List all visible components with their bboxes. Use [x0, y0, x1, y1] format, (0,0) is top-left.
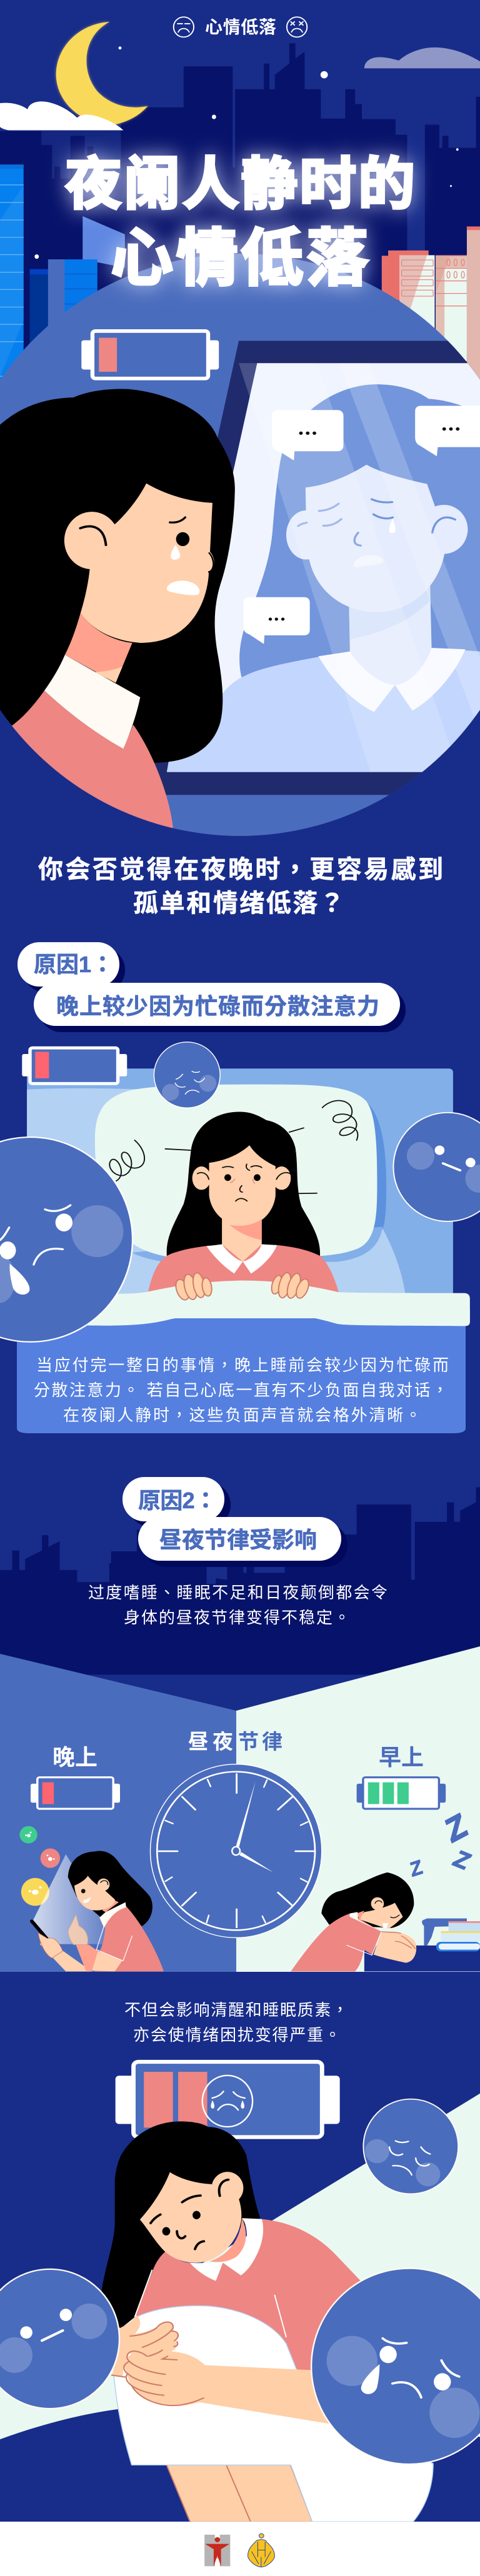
- reason 1 label: 晚上较少因为忙碌而分散注意力: [56, 993, 379, 1019]
- text: reason 2: 身体的昼夜节律变得不稳定。: [124, 1608, 350, 1627]
- salmon buildings right: [382, 226, 480, 382]
- battery: morning: [357, 1778, 446, 1809]
- arm: [124, 2352, 334, 2425]
- dark skyline: [0, 43, 480, 437]
- body copy: 当应付完一整日的事情，晚上睡前会较少因为忙碌而: [36, 1356, 449, 1375]
- title: [65, 153, 415, 294]
- woman in bed: [148, 1111, 339, 1310]
- lighter distant building: [41, 131, 121, 179]
- light rays: [239, 363, 480, 772]
- moon: [56, 22, 148, 126]
- reflection neck: [349, 585, 432, 685]
- face: [64, 484, 214, 643]
- stars: [34, 46, 459, 259]
- blanket hem: [43, 1310, 470, 1326]
- panel: day and night background: [0, 1646, 480, 1972]
- emoji bubbles: [19, 1826, 60, 1906]
- battery: night: [31, 1778, 120, 1809]
- big battery: [116, 2062, 340, 2137]
- neck: [65, 613, 132, 683]
- small heading: 心情低落: [205, 17, 276, 37]
- title: 夜阑人静时的: [65, 153, 415, 216]
- cloud: violet: [364, 47, 480, 68]
- mirror screen: [167, 363, 480, 772]
- body copy: 在夜阑人静时，这些负面声音就会格外清晰。: [63, 1406, 421, 1425]
- woman face: [140, 2172, 263, 2281]
- label: night: 晚上: [52, 1744, 98, 1770]
- icon: crying face: [202, 2076, 252, 2127]
- label: morning: 早上: [379, 1744, 424, 1770]
- panel: circadian rhythm: [19, 1764, 480, 1971]
- blanket: [86, 1281, 470, 1325]
- shirt: [135, 2219, 361, 2370]
- shirt: [11, 690, 173, 828]
- cloud: white: [0, 101, 123, 130]
- reflection hair: [239, 384, 480, 679]
- body copy: 分散注意力。 若自己心底一直有不少负面自我对话，: [34, 1381, 448, 1400]
- question heading: 你会否觉得在夜晚时，更容易感到: [38, 856, 443, 883]
- monitor frame: [139, 341, 480, 795]
- reason 2 label: 昼夜节律受影响: [159, 1527, 317, 1553]
- mint backdrop: [0, 2094, 480, 2439]
- icon: sad face: [174, 17, 194, 37]
- battery: very low: [22, 1048, 127, 1083]
- body copy: [34, 1356, 449, 1425]
- logo: yellow hands: [248, 2534, 274, 2567]
- text panel: reason 1: [17, 1310, 470, 1433]
- phone light: [33, 1854, 118, 1944]
- leg: [165, 2462, 312, 2522]
- reflection: [167, 363, 480, 772]
- headboard: [27, 1068, 453, 1296]
- blue buildings middle: [30, 216, 125, 350]
- text: worsening: [124, 2001, 348, 2044]
- emotion bubble: big left crying: [0, 1137, 132, 1342]
- logo: department: [204, 2535, 230, 2566]
- woman: [0, 389, 235, 856]
- finger lines: [112, 2322, 204, 2405]
- sleeping girl: [291, 1872, 416, 1971]
- mattress: [27, 1088, 406, 1296]
- reason 1 label: 原因1：: [34, 952, 114, 977]
- skyline and reason 2 backdrop: [0, 1487, 480, 1674]
- emotion bubble: small top: [154, 1042, 220, 1108]
- emotion bubble: big right crying: [311, 2269, 480, 2464]
- city night scene: [0, 22, 480, 437]
- table and books: [364, 1919, 480, 1971]
- hands on blanket: [173, 1271, 311, 1301]
- icon: dizzy face: [287, 17, 307, 37]
- hugged pillow: [114, 2305, 433, 2522]
- title: 心情低落: [111, 224, 369, 294]
- emotion bubble: top right: [363, 2099, 458, 2194]
- blue tower left: [0, 164, 24, 382]
- text: reason 2: [88, 1583, 388, 1627]
- clock: [150, 1764, 322, 1937]
- question heading: 孤单和情绪低落？: [133, 890, 344, 917]
- Z letters: Z: [448, 1846, 476, 1875]
- reason 1 label: [18, 942, 406, 1032]
- header label: [174, 17, 307, 37]
- question heading: [38, 856, 443, 917]
- speech bubble 1: [272, 410, 344, 460]
- emotion bubble: left: [0, 2269, 119, 2409]
- emotion bubble: right: [393, 1113, 480, 1221]
- Z letters: Z: [408, 1856, 424, 1881]
- heading: circadian rhythm: [188, 1730, 282, 1753]
- text: reason 2: 过度嗜睡、睡眠不足和日夜颠倒都会令: [88, 1583, 388, 1602]
- panel: bed illustration: [22, 1042, 480, 1325]
- reason 2 label: [122, 1477, 348, 1567]
- text: worsening: 亦会使情绪困扰变得严重。: [133, 2026, 341, 2044]
- hair: [102, 2121, 260, 2329]
- stress squiggles: [109, 1101, 358, 1193]
- heading: circadian rhythm: 昼夜: [188, 1730, 233, 1753]
- collar: [44, 655, 140, 749]
- reflection collar: [318, 648, 465, 712]
- illustration: woman and mirror in circle: [0, 250, 480, 856]
- reflection face: [286, 465, 468, 612]
- girl with phone: [32, 1851, 164, 1971]
- speech bubble 3: [243, 597, 310, 644]
- hair: [0, 389, 235, 772]
- Z letters: Z: [441, 1807, 471, 1850]
- reflection body: [167, 648, 480, 772]
- Z letters: [408, 1807, 476, 1881]
- pillow shadow: [361, 1098, 386, 1248]
- text: worsening: 不但会影响清醒和睡眠质素，: [124, 2001, 348, 2019]
- pillow: [95, 1085, 377, 1257]
- panel: woman hugging knees: [0, 2099, 480, 2522]
- battery: low: [81, 331, 219, 379]
- reason 2 label: 原因2：: [138, 1488, 217, 1513]
- speech bubble 2: [415, 406, 480, 456]
- heading: circadian rhythm: 节律: [238, 1730, 282, 1753]
- footer: [0, 2522, 480, 2576]
